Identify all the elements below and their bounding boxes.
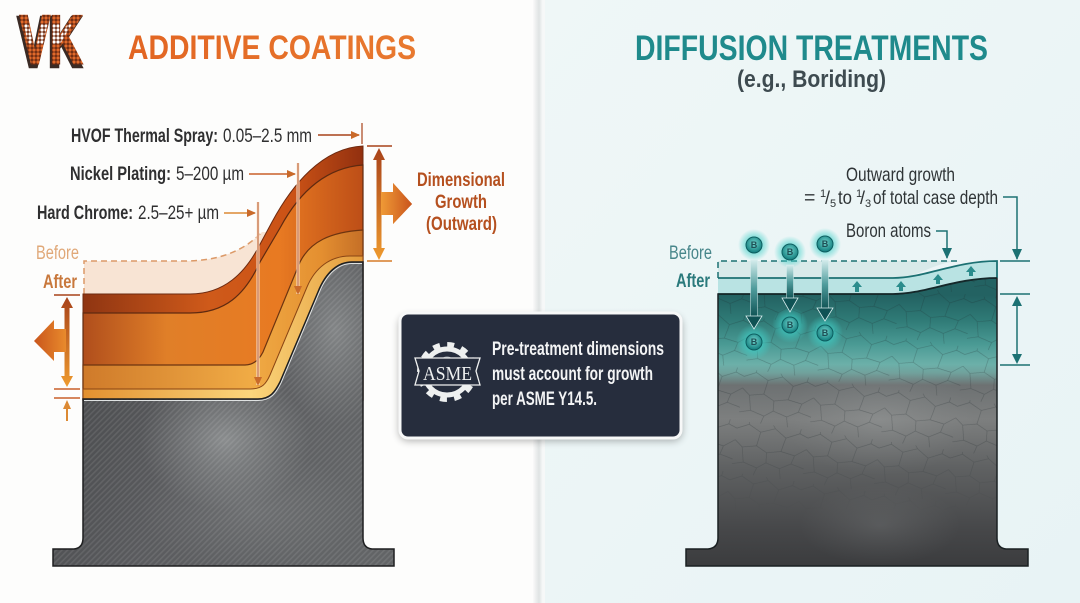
label: HVOF thermal spray: HVOF Thermal Spray: <box>71 125 218 147</box>
boron atoms with arrows: B <box>751 240 758 250</box>
boron atoms with arrows: B <box>822 328 829 338</box>
title: diffusion treatments: DIFFUSION TREATMENTS <box>635 29 988 68</box>
label: HVOF thermal spray <box>71 123 362 147</box>
label: dimensional growth: Dimensional <box>417 170 505 191</box>
label: outward growth: 1 <box>856 188 862 200</box>
label: outward growth: Outward growth <box>846 164 955 186</box>
title: diffusion treatments: (e.g., Boriding) <box>737 66 886 93</box>
label: hard chrome: Hard Chrome: <box>37 202 133 224</box>
label: outward growth: / <box>825 188 830 208</box>
label: outward growth: 1 <box>820 188 826 200</box>
arrow: boron atoms leader <box>936 231 947 258</box>
left panel background <box>0 0 534 603</box>
label: boron atoms: Boron atoms <box>846 220 931 242</box>
label: HVOF thermal spray: 0.05–2.5 mm <box>223 125 312 147</box>
label: hard chrome <box>37 202 258 385</box>
label: nickel plating <box>70 163 298 294</box>
logo: VK <box>16 14 84 68</box>
callout: ASME note <box>399 313 682 441</box>
icon: ASME gear <box>415 344 480 400</box>
steel substrate <box>53 235 395 570</box>
label: outward growth: of total case depth <box>873 187 998 209</box>
layer: base <box>83 256 363 400</box>
label: dimensional growth: (Outward) <box>426 214 497 235</box>
dimension arrow: outward growth top <box>367 146 412 261</box>
logo: VK: VK <box>20 2 82 78</box>
before layer <box>718 261 960 278</box>
logo: VK: VK <box>20 2 82 78</box>
layer: nickel plating <box>83 165 363 400</box>
icon: ASME gear: ASME <box>423 363 472 385</box>
label: dimensional growth <box>417 170 505 235</box>
grown layer <box>718 261 997 294</box>
small growth arrows <box>852 266 976 292</box>
label: nickel plating: 5–200 µm <box>176 163 244 185</box>
title: additive coatings: ADDITIVE COATINGS <box>128 29 416 67</box>
label: hard chrome: 2.5–25+ µm <box>138 202 219 224</box>
boron atoms with arrows: B <box>787 247 794 257</box>
label: outward growth: 5 <box>830 198 836 210</box>
layer: HVOF thermal spray <box>83 146 363 400</box>
label: outward growth: 3 <box>865 198 871 210</box>
label: after left: After <box>43 272 77 293</box>
label: outward growth: / <box>860 188 865 208</box>
logo: VK: VK <box>18 3 81 81</box>
dimension arrow: case depth <box>1000 261 1030 365</box>
boron atoms with arrows: B <box>822 239 829 249</box>
dimension arrow: left growth <box>34 295 80 421</box>
boron atoms with arrows: B <box>751 337 758 347</box>
boron atoms with arrows: B <box>787 320 794 330</box>
right panel background <box>544 0 1080 603</box>
label: nickel plating: Nickel Plating: <box>70 163 171 185</box>
substrate with case <box>686 278 1028 566</box>
label: outward growth <box>804 164 998 210</box>
boron atoms with arrows <box>736 228 843 360</box>
callout text <box>492 339 664 410</box>
label: before left: Before <box>36 243 79 264</box>
layer: hard chrome <box>83 230 363 400</box>
arrow: outward growth leader <box>1003 197 1017 259</box>
before profile dashed <box>84 232 270 294</box>
diagram: diffusion part <box>686 261 1028 566</box>
callout text: per ASME Y14.5. <box>492 389 597 410</box>
label: after right: After <box>676 271 710 292</box>
label: outward growth: = <box>804 187 815 209</box>
label: before right: Before <box>669 243 712 264</box>
label: outward growth: to <box>838 187 852 209</box>
label: dimensional growth: Growth <box>435 192 487 213</box>
diagram: additive coatings part <box>53 146 395 570</box>
callout text: must account for growth <box>492 364 653 385</box>
title: diffusion treatments <box>635 29 988 93</box>
callout text: Pre-treatment dimensions <box>492 339 664 360</box>
